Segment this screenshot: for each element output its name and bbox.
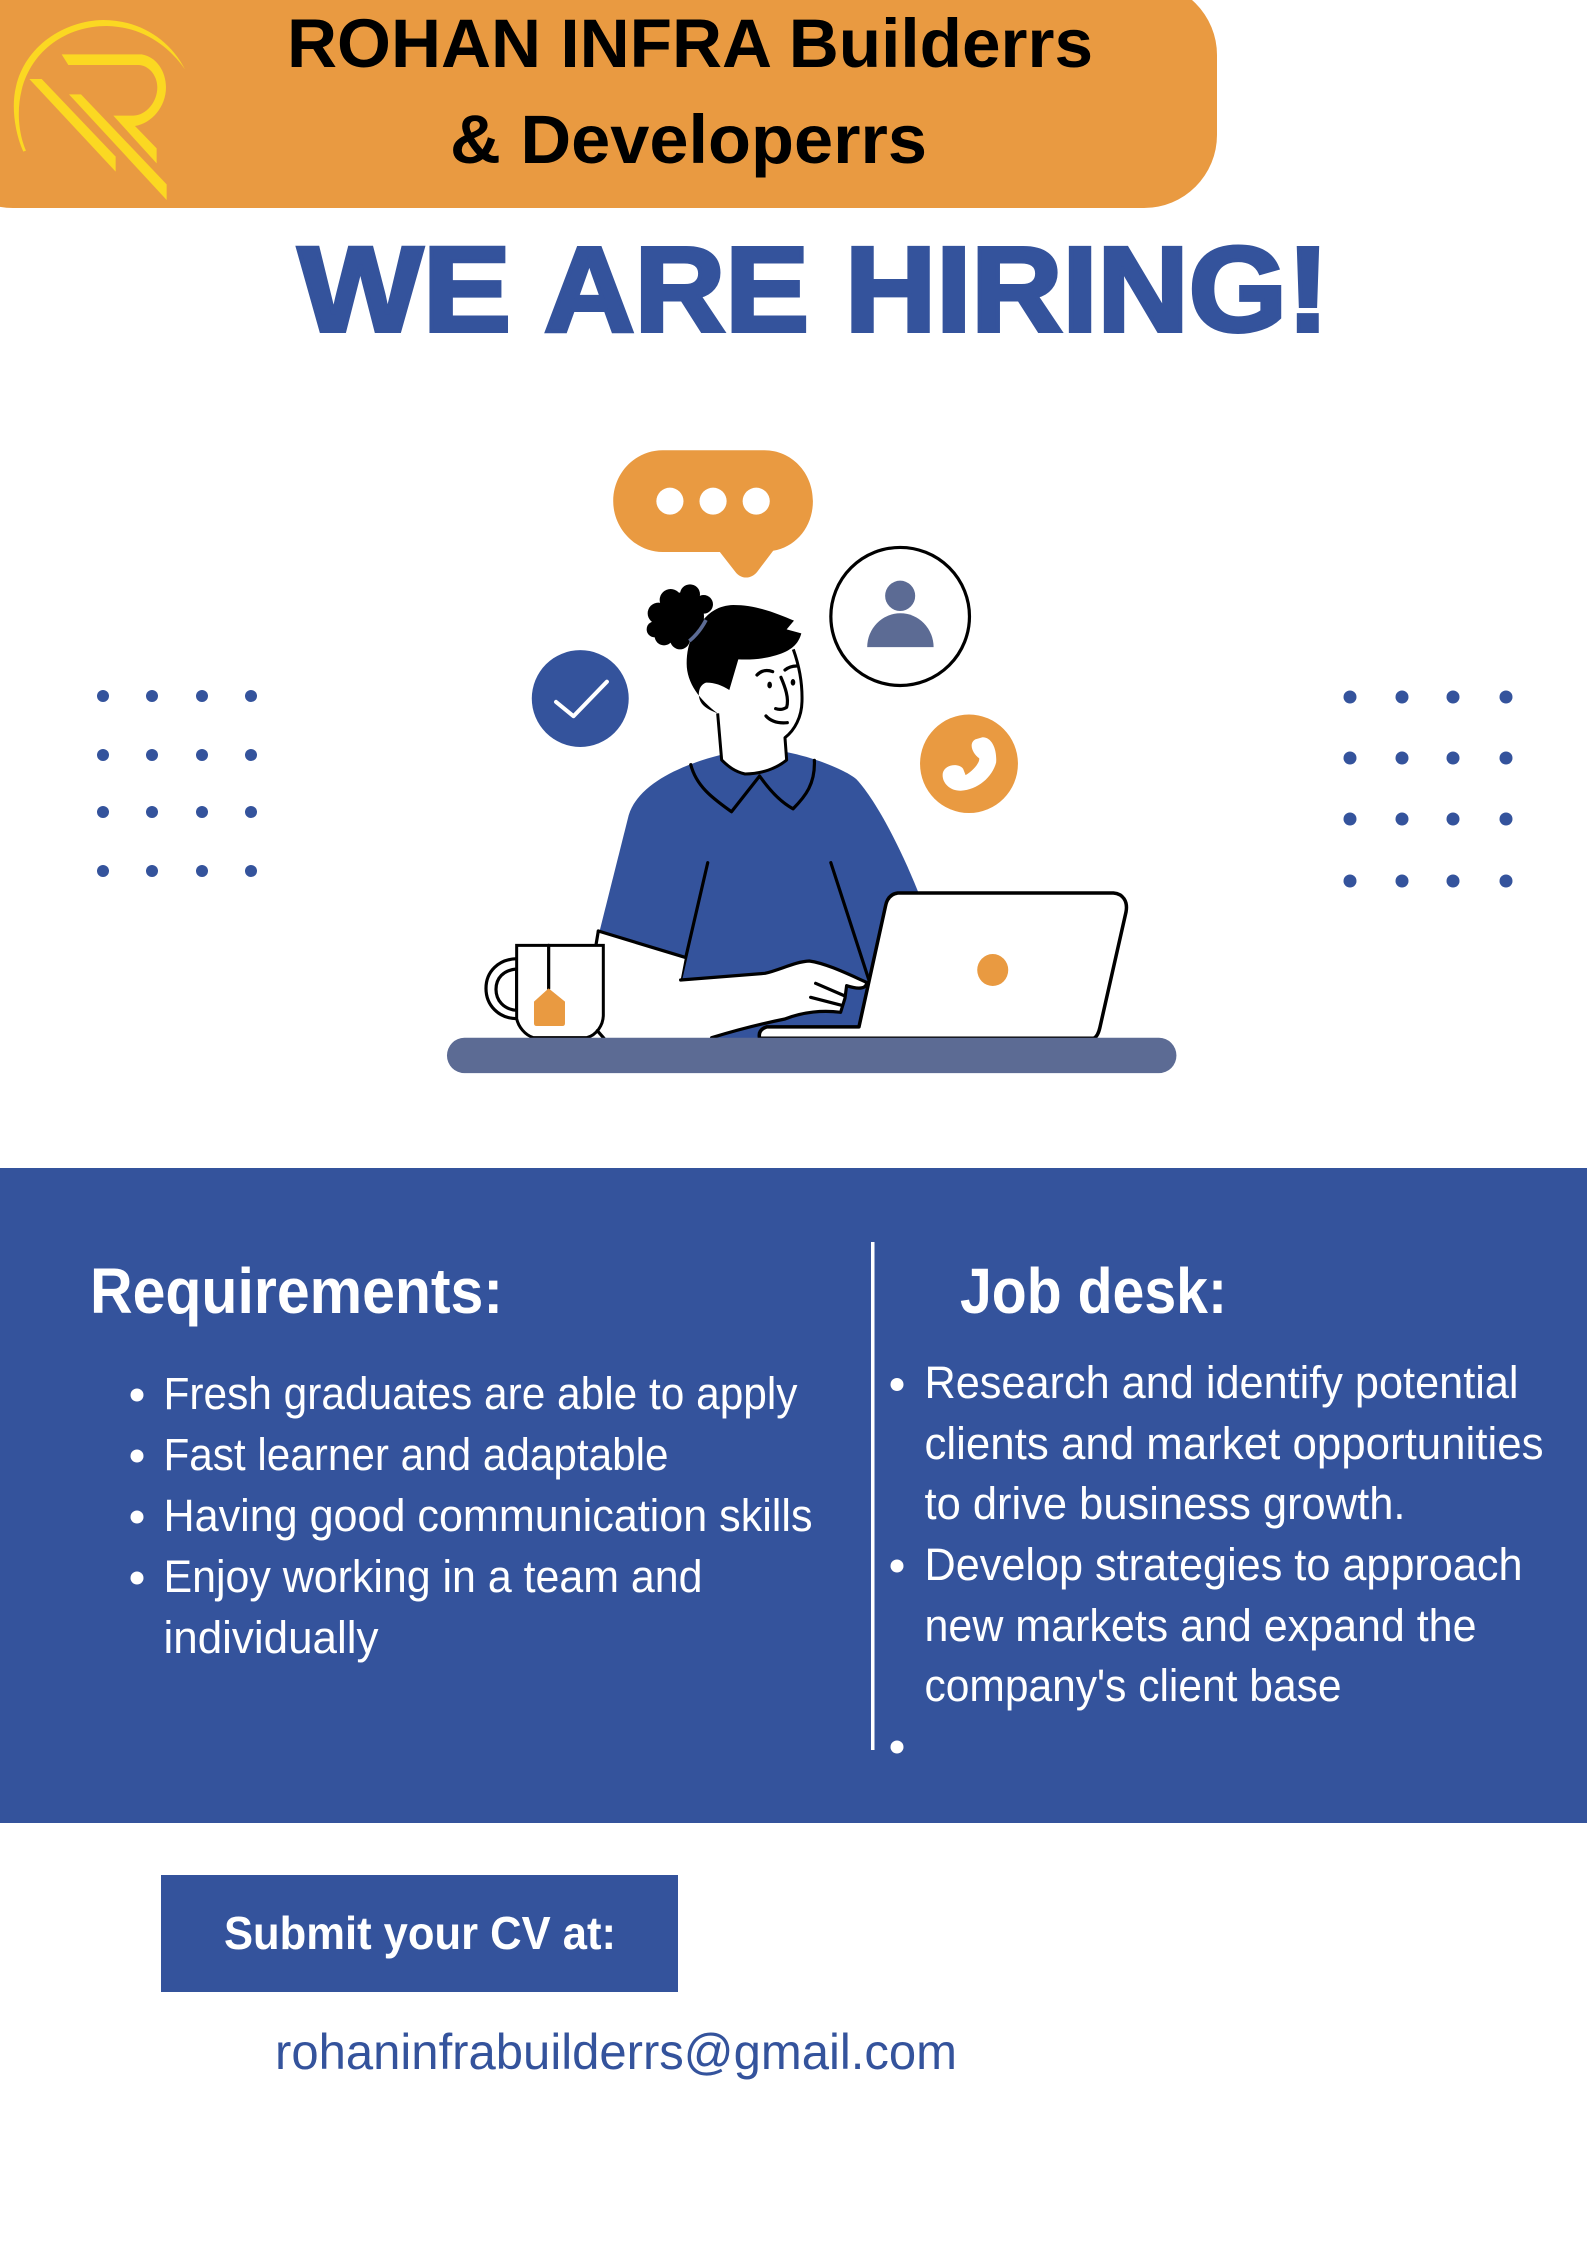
requirements list: Having good communication skills bbox=[164, 1490, 812, 1541]
shirt bbox=[597, 752, 919, 1038]
panel: requirements and job desk bbox=[0, 1168, 1587, 1823]
face outline bbox=[718, 649, 802, 774]
desk bbox=[447, 1038, 1176, 1073]
submit CV button: Submit your CV at: bbox=[224, 1907, 616, 1959]
decorative dots left bbox=[97, 690, 257, 877]
title: ARE bbox=[544, 221, 809, 357]
hair bbox=[687, 605, 801, 713]
title: WE bbox=[298, 221, 511, 357]
icon: user profile circle bbox=[831, 547, 969, 685]
requirements list: Fast learner and adaptable bbox=[164, 1429, 668, 1480]
icon: speech bubble bbox=[613, 450, 813, 578]
requirements list: Fresh graduates are able to apply bbox=[164, 1368, 798, 1419]
laptop bbox=[759, 893, 1126, 1038]
requirements list: Enjoy working in a team and bbox=[164, 1551, 702, 1602]
job desk list: clients and market opportunities bbox=[924, 1418, 1544, 1469]
job desk list bbox=[890, 1357, 1544, 1754]
contact email: rohaninfrabuilderrs@gmail.com bbox=[275, 2024, 957, 2080]
head and hair bbox=[647, 584, 802, 774]
title bbox=[298, 221, 1329, 357]
submit CV button bbox=[161, 1875, 678, 1992]
decorative dots right bbox=[1344, 690, 1512, 888]
column divider bbox=[871, 1242, 874, 1750]
face and neck fill bbox=[718, 649, 802, 774]
job desk list: Research and identify potential bbox=[924, 1357, 1518, 1408]
job desk list: new markets and expand the bbox=[924, 1600, 1476, 1651]
shirt seams bbox=[681, 863, 869, 980]
job desk list: Develop strategies to approach bbox=[924, 1539, 1522, 1590]
icon: phone circle bbox=[920, 715, 1018, 813]
company name line 1: ROHAN INFRA Builderrs bbox=[287, 5, 1093, 82]
collar bbox=[691, 760, 814, 812]
arm, hand and mug bbox=[486, 931, 867, 1038]
facial features bbox=[757, 666, 797, 723]
requirements list: individually bbox=[164, 1612, 379, 1663]
company name line 2: & Developerrs bbox=[450, 101, 927, 178]
job desk list: company's client base bbox=[924, 1660, 1342, 1711]
hair bun bbox=[647, 584, 713, 649]
mug with tea bag bbox=[486, 945, 604, 1038]
requirements list bbox=[130, 1368, 812, 1663]
job desk heading: Job desk: bbox=[960, 1255, 1227, 1327]
requirements heading: Requirements: bbox=[90, 1255, 503, 1327]
panel background bbox=[0, 1168, 1587, 1823]
illustration: person working at laptop bbox=[447, 450, 1176, 1073]
header banner bbox=[0, 0, 1217, 208]
job desk list: to drive business growth. bbox=[924, 1478, 1406, 1529]
hair band bbox=[689, 620, 706, 641]
icon: company logo bbox=[14, 20, 185, 200]
arm and hand bbox=[570, 931, 867, 1038]
title: HIRING! bbox=[845, 221, 1329, 357]
banner shape bbox=[0, 0, 1217, 208]
icon: check mark circle bbox=[532, 650, 629, 747]
